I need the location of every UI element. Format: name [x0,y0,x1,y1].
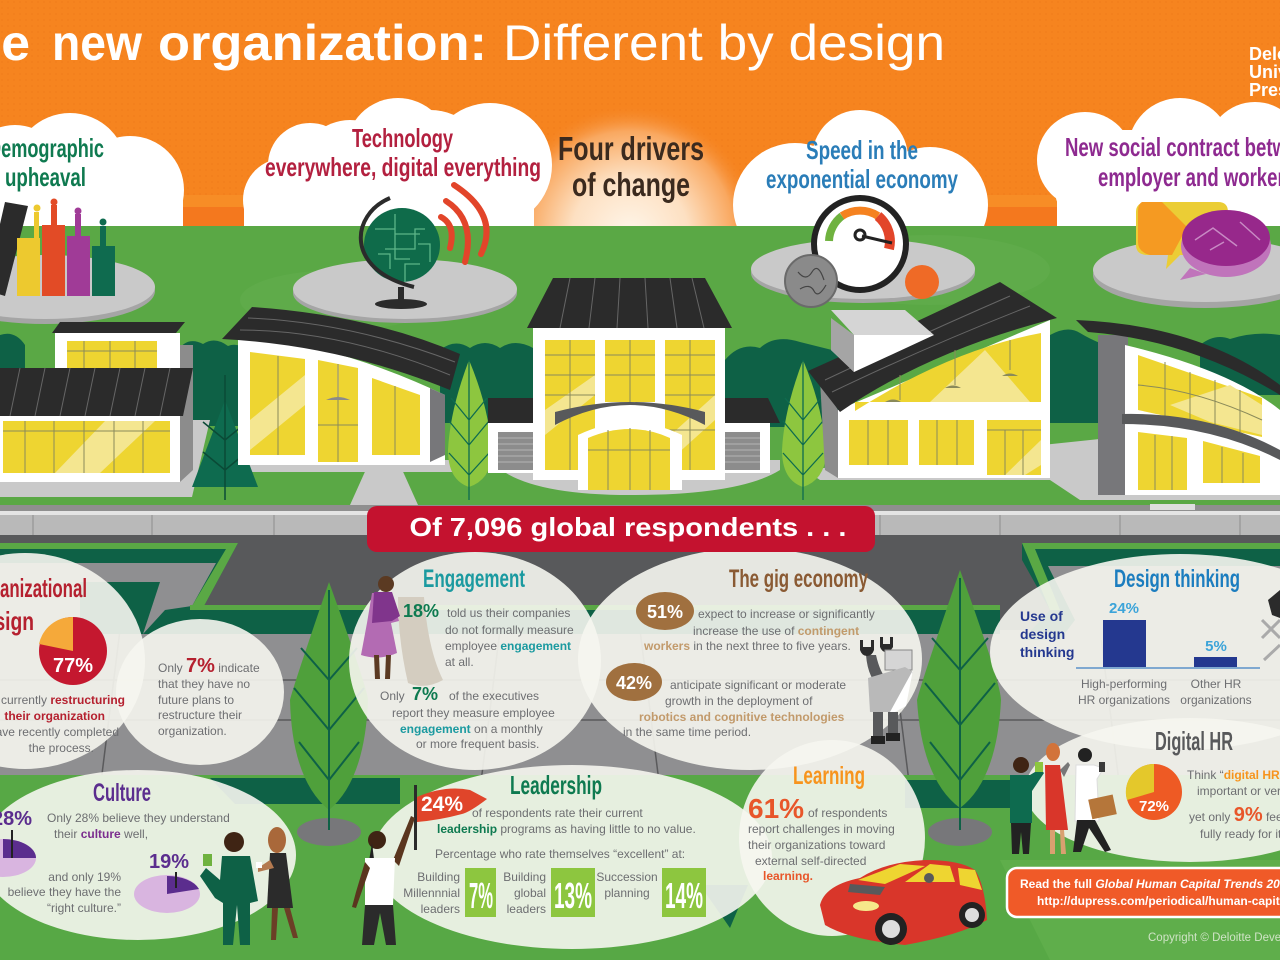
text: use of design thinking: Use of [1020,608,1063,624]
text: digital HR [1187,768,1280,841]
sky background [0,0,1280,228]
stat: 42% [606,663,662,701]
icon: handshake speech bubbles [1093,202,1280,308]
flag: 24% [414,785,487,850]
tree: lower left [290,582,368,846]
title [0,15,945,71]
text: contingent workers: workers in the next three to five years. [643,639,851,653]
chart: 72% pie [1126,764,1182,820]
title: organization: [158,15,487,71]
text: robotics: anticipate significant or moderate [670,678,846,692]
cloud: speed [733,110,988,267]
text: robotics: in the same time period. [623,725,751,739]
stat: building millennial leaders 7%: leaders [421,902,460,916]
text: 7%: of the executives [449,689,539,703]
icon: design cube [1262,590,1280,660]
text: contingent workers: expect to increase or significantly [698,607,875,621]
text: 61%: report challenges in moving [748,822,895,836]
heading: speed: exponential economy [766,164,958,194]
title: Different by design [503,15,945,71]
heading: speed [766,135,958,194]
text: 18%: told us their companies [447,606,570,620]
heading: learning: Learning [793,762,865,790]
panel: only 7% [116,619,284,765]
text: leadership programs: leadership programs as having little to no value. [437,822,696,836]
stat: building global leaders 13%: leaders [507,902,546,916]
bar chart: design thinking: 24% [1109,600,1139,617]
text: robotics [623,678,846,739]
heading: four drivers of change: of change [572,166,690,203]
building: fourth house [808,282,1057,478]
building: second house [222,307,460,465]
panel: engagement [349,552,601,770]
panel: leadership [372,765,772,949]
text: contingent workers: increase the use of contingent [693,624,859,638]
logo: Deloitte University Press [1249,44,1280,100]
stat: succession planning 14%: planning [604,886,650,900]
cloud: demographic [0,113,184,244]
text: use of design thinking: design [1020,626,1065,642]
bar chart: design thinking [1076,600,1260,707]
hedges: lower garden [0,543,1280,640]
text: 61%: of respondents [808,806,887,820]
heading: technology: everywhere, digital everything [265,152,541,182]
stat: 51%: 51% [647,602,683,622]
bar chart: design thinking: Other HR [1191,677,1242,691]
stat: succession planning 14%: Succession [596,870,658,884]
stat: 42%: 42% [616,673,652,693]
panel: learning [739,740,925,936]
heading: speed: Speed in the [806,135,918,165]
heading: four drivers of change: Four drivers [558,130,704,167]
text: robotics: robotics and cognitive technologies [639,710,845,724]
tree: lower right [917,570,1001,846]
text: 18%: 18% [403,601,439,621]
text: no future plans: future plans to [158,693,234,707]
chart: 19% pie [134,851,200,913]
tree: light right [782,360,826,500]
illustration: woman with scroll [361,576,443,686]
building: right house [1076,320,1280,495]
stat: building global leaders 13%: global [514,886,546,900]
lawn: lower garden [0,775,1280,960]
stat: building global leaders 13% [503,868,595,917]
text: 18% [403,601,574,669]
icon: speed gauge and coins [751,198,975,307]
text: 18%: employee engagement [445,639,571,653]
cloud: technology [243,98,552,242]
illustration: red car [820,860,987,945]
text: leadership programs: Percentage who rate themselves “excellent” at: [435,847,685,861]
cloud: new social contract [1037,98,1280,227]
heading: culture: Culture [93,779,151,807]
text: 7% [380,684,555,751]
text: restructuring: the process. [29,741,94,755]
icon: demographic bars [0,198,155,324]
text: no future plans: that they have no [158,677,250,691]
text: 7%: engagement on a monthly [400,722,543,736]
text: 19% right culture: “right culture.” [47,901,121,915]
heading: organizational design [0,573,87,636]
heading: leadership: Leadership [510,770,602,800]
illustration: robot [860,637,913,744]
text: use of design thinking: thinking [1020,644,1074,660]
bar chart: design thinking: High-performing [1081,677,1167,691]
banner: of 7,096 global respondents: Of 7,096 global respondents . . . [410,512,846,542]
panel: design thinking [990,554,1280,750]
text: 7%: 7% [412,684,438,704]
heading: demographic upheaval: upheaval [5,162,86,192]
text: 61% [748,793,895,883]
heading: new social contract [1065,132,1280,192]
figure: woman holding flag [352,816,415,945]
text: no future plans [158,655,260,738]
text: use of design thinking [1020,608,1074,660]
text: leadership programs [435,806,696,861]
figure: man and woman talking [200,827,298,945]
stat: building global leaders 13%: 13% [554,875,592,916]
panel: digital HR [1025,718,1280,862]
banner: of 7,096 global respondents [367,506,875,552]
text: leadership programs: of respondents rate their current [472,806,643,820]
bar chart: design thinking: 5% [1205,638,1227,655]
text: restructuring [0,693,125,755]
ground and lawn [0,226,1280,516]
text: 19% right culture [8,870,121,915]
heading: four drivers of change [558,130,704,203]
stat: building global leaders 13%: Building [503,870,546,884]
tree: light left [448,360,492,500]
text: 61%: learning. [763,869,813,883]
building: left house [0,322,193,482]
sidewalk [0,505,1280,535]
bar chart: design thinking: HR organizations [1078,693,1170,707]
chart: 28% pie [0,830,36,877]
hedges behind buildings [0,329,1280,427]
text: 28% understand culture: their culture well, [54,827,148,841]
text: no future plans: organization. [158,724,227,738]
heading: technology: Technology [352,123,453,153]
stat: 51% [636,592,694,630]
chart: 77% pie: 77% [53,655,93,677]
text: 28% understand culture [0,808,230,841]
panel: the gig economy [578,548,922,770]
figure: three people with devices [1010,743,1117,854]
text: 61%: their organizations toward [748,838,885,852]
driveway and platforms [0,420,1280,510]
stat: building millennial leaders 7%: Building [417,870,460,884]
text: 19% right culture: believe they have the [8,885,121,899]
heading: technology [265,123,541,182]
stat: building millennial leaders 7%: Millennnial [403,886,460,900]
text: 61%: 61% [748,793,804,824]
title: new [52,15,142,71]
text: robotics: growth in the deployment of [665,694,813,708]
building: center hall [488,278,780,490]
text: 7%: report they measure employee [392,706,555,720]
heading: the gig economy: The gig economy [729,565,868,593]
tree: dark pine [192,375,258,500]
text: 7%: Only [380,689,405,703]
text: 61%: external self-directed [755,854,866,868]
panel: organizational design [0,553,145,769]
chart: 72% pie: 72% [1139,798,1169,815]
text: no future plans: restructure their [158,708,242,722]
text: no future plans: Only 7% indicate [158,655,260,677]
text: 19% right culture: and only 19% [48,870,121,884]
panel: culture [0,770,296,940]
stat: building millennial leaders 7%: 7% [469,875,493,916]
text: 18%: at all. [445,655,474,669]
heading: engagement: Engagement [423,565,525,593]
text: 28% understand culture: Only 28% believe they understand [47,811,230,825]
callout: read the full report [1007,868,1280,917]
road and lower pavement [0,535,1280,790]
stat: building millennial leaders 7% [403,868,496,917]
stat: succession planning 14%: 14% [665,875,703,916]
stat: succession planning 14% [596,868,706,917]
flag: 24%: 24% [421,793,463,816]
text: 18%: do not formally measure [445,623,574,637]
text: restructuring: their organization [4,709,105,723]
icon: globe with signal [293,185,517,323]
text: 7%: or more frequent basis. [416,737,539,751]
heading: demographic upheaval [0,133,104,192]
chart: 77% pie [39,617,107,685]
chart: 19% pie: 19% [149,851,189,873]
bar chart: design thinking: organizations [1180,693,1252,707]
text: contingent workers [643,607,875,653]
heading: digital HR: Digital HR [1155,726,1233,756]
